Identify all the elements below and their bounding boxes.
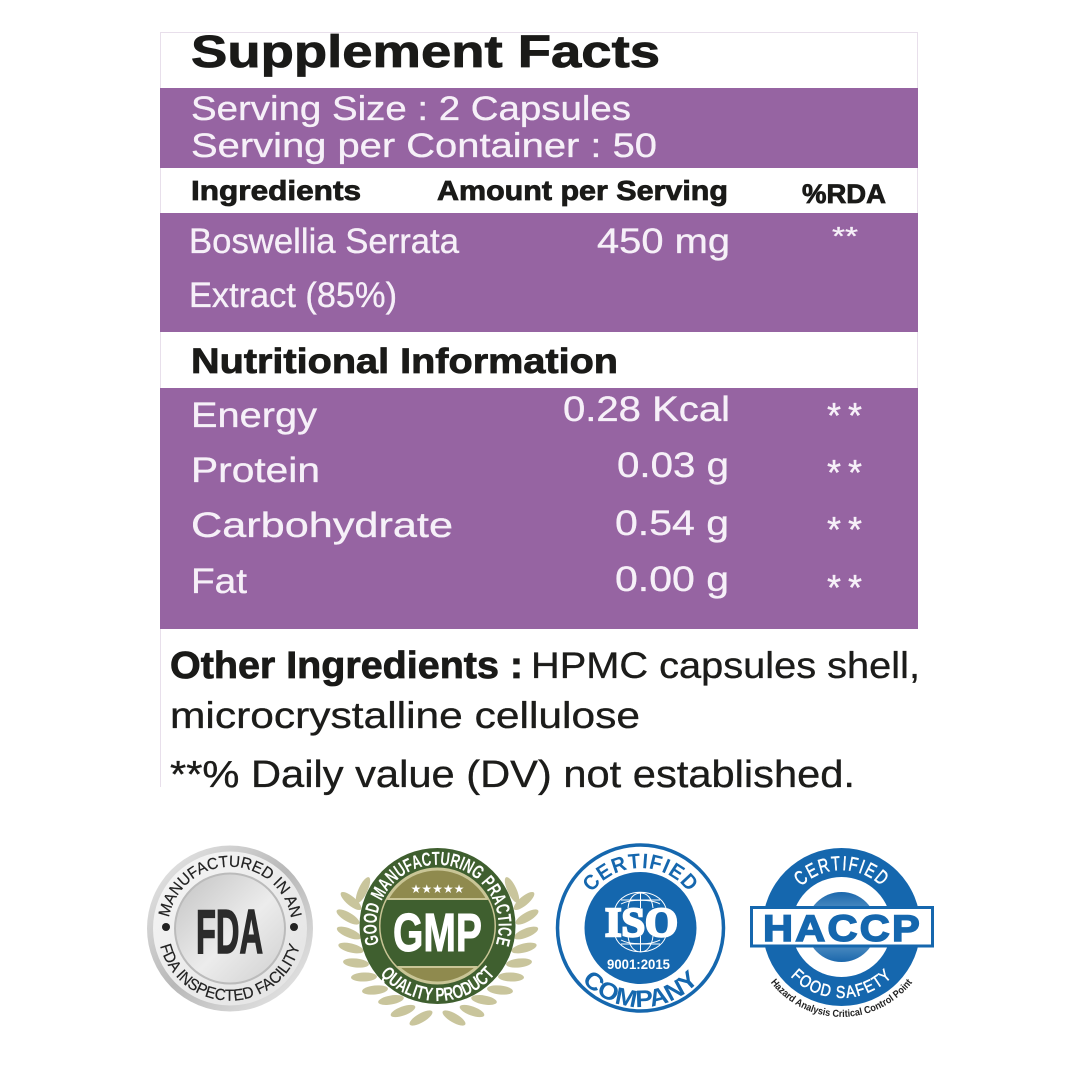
title: Supplement Facts <box>191 26 660 77</box>
other ingredients label: Other Ingredients : <box>170 645 523 687</box>
ingredient RDA: ** <box>832 221 858 251</box>
ingredient name line 1: Boswellia Serrata <box>189 222 460 261</box>
GMP bottom arc text: QUALITY PRODUCT <box>382 965 494 1002</box>
GMP wordmark: GMP <box>393 903 482 963</box>
FDA text band <box>153 852 307 1006</box>
GMP centre band <box>375 899 500 967</box>
other ingredients line 2: microcrystalline cellulose <box>170 695 640 736</box>
badge: HACCP <box>750 848 934 1017</box>
daily value note: **% Daily value (DV) not established. <box>170 754 855 796</box>
column headings <box>191 175 886 209</box>
left laurel leaves <box>334 875 435 1028</box>
GMP inner disc <box>380 869 494 983</box>
row: protein: ** <box>827 452 862 493</box>
FDA top arc text: MANUFACTURED IN AN <box>158 856 302 918</box>
text block: other ingredients <box>170 645 920 796</box>
heading: amount per serving: Amount per Serving <box>437 175 728 206</box>
GMP outer disc <box>360 848 516 1004</box>
serving size: Serving Size : 2 Capsules <box>191 90 631 128</box>
row: carbohydrate: ** <box>827 509 862 550</box>
row: fat: ** <box>827 567 862 608</box>
row: energy: ** <box>827 395 862 436</box>
ISO inner disc <box>584 872 696 984</box>
HACCP white centre <box>792 877 892 977</box>
ISO top arc text: CERTIFIED <box>584 854 696 890</box>
ISO upper globe lines <box>615 892 666 908</box>
ISO standard number: 9001:2015 <box>607 956 670 972</box>
ISO wordmark: ISO <box>605 899 678 945</box>
right laurel leaves <box>440 875 541 1028</box>
row: fat: Fat <box>191 562 247 601</box>
table outline <box>160 32 918 787</box>
row: fat <box>191 560 862 608</box>
HACCP banner <box>752 908 932 946</box>
HACCP bottom arc text: FOOD SAFETY <box>791 968 890 998</box>
servings per container: Serving per Container : 50 <box>191 127 657 165</box>
row: carbohydrate <box>191 504 862 550</box>
HACCP wordmark: HACCP <box>763 908 922 949</box>
panel: supplement facts table <box>160 26 920 796</box>
heading: nutritional information: Nutritional Information <box>191 342 618 381</box>
GMP stars: ★★★★★ <box>411 882 464 896</box>
ingredient band <box>160 213 918 332</box>
row: carbohydrate: 0.54 g <box>615 504 729 543</box>
nutrition band <box>160 388 918 629</box>
ingredient amount: 450 mg <box>597 222 730 261</box>
row: protein: 0.03 g <box>617 446 729 485</box>
panel: nutrition rows <box>160 388 918 629</box>
panel: active ingredient <box>160 213 918 332</box>
row: protein: Protein <box>191 451 320 490</box>
HACCP top arc text: CERTIFIED <box>794 856 888 884</box>
FDA inner disc <box>175 874 285 984</box>
row: energy <box>191 390 862 436</box>
serving band <box>160 88 918 168</box>
ISO bottom arc text: COMPANY <box>585 969 694 1008</box>
row: energy: 0.28 Kcal <box>563 390 730 429</box>
GMP top arc text: GOOD MANUFACTURING PRACTICE <box>363 852 512 947</box>
FDA outer ring <box>147 846 313 1012</box>
FDA bottom arc text: FDA INSPECTED FACILITY <box>160 942 299 1001</box>
row: protein <box>191 446 862 493</box>
heading: percent RDA: %RDA <box>802 179 886 209</box>
FDA separator dots <box>162 923 298 931</box>
HACCP gradient dot <box>806 892 876 962</box>
HACCP caption: Hazard Analysis Critical Control Point <box>770 978 912 1017</box>
ISO outer ring <box>558 845 724 1011</box>
heading: ingredients: Ingredients <box>191 175 361 206</box>
HACCP blue disc <box>762 848 920 1006</box>
panel: serving information <box>160 88 918 168</box>
infographic canvas <box>147 32 934 1026</box>
ISO lower globe lines <box>615 936 666 952</box>
other ingredients line 1: HPMC capsules shell, <box>531 645 920 686</box>
row: fat: 0.00 g <box>615 560 729 599</box>
badge: GMP <box>336 848 538 1026</box>
row: carbohydrate: Carbohydrate <box>191 506 453 545</box>
FDA wordmark: FDA <box>196 898 263 967</box>
badge: ISO <box>556 843 726 1013</box>
ingredient name line 2: Extract (85%) <box>189 276 397 315</box>
badge: FDA <box>147 846 313 1012</box>
row: energy: Energy <box>191 396 318 435</box>
GMP laurel <box>334 875 541 1028</box>
